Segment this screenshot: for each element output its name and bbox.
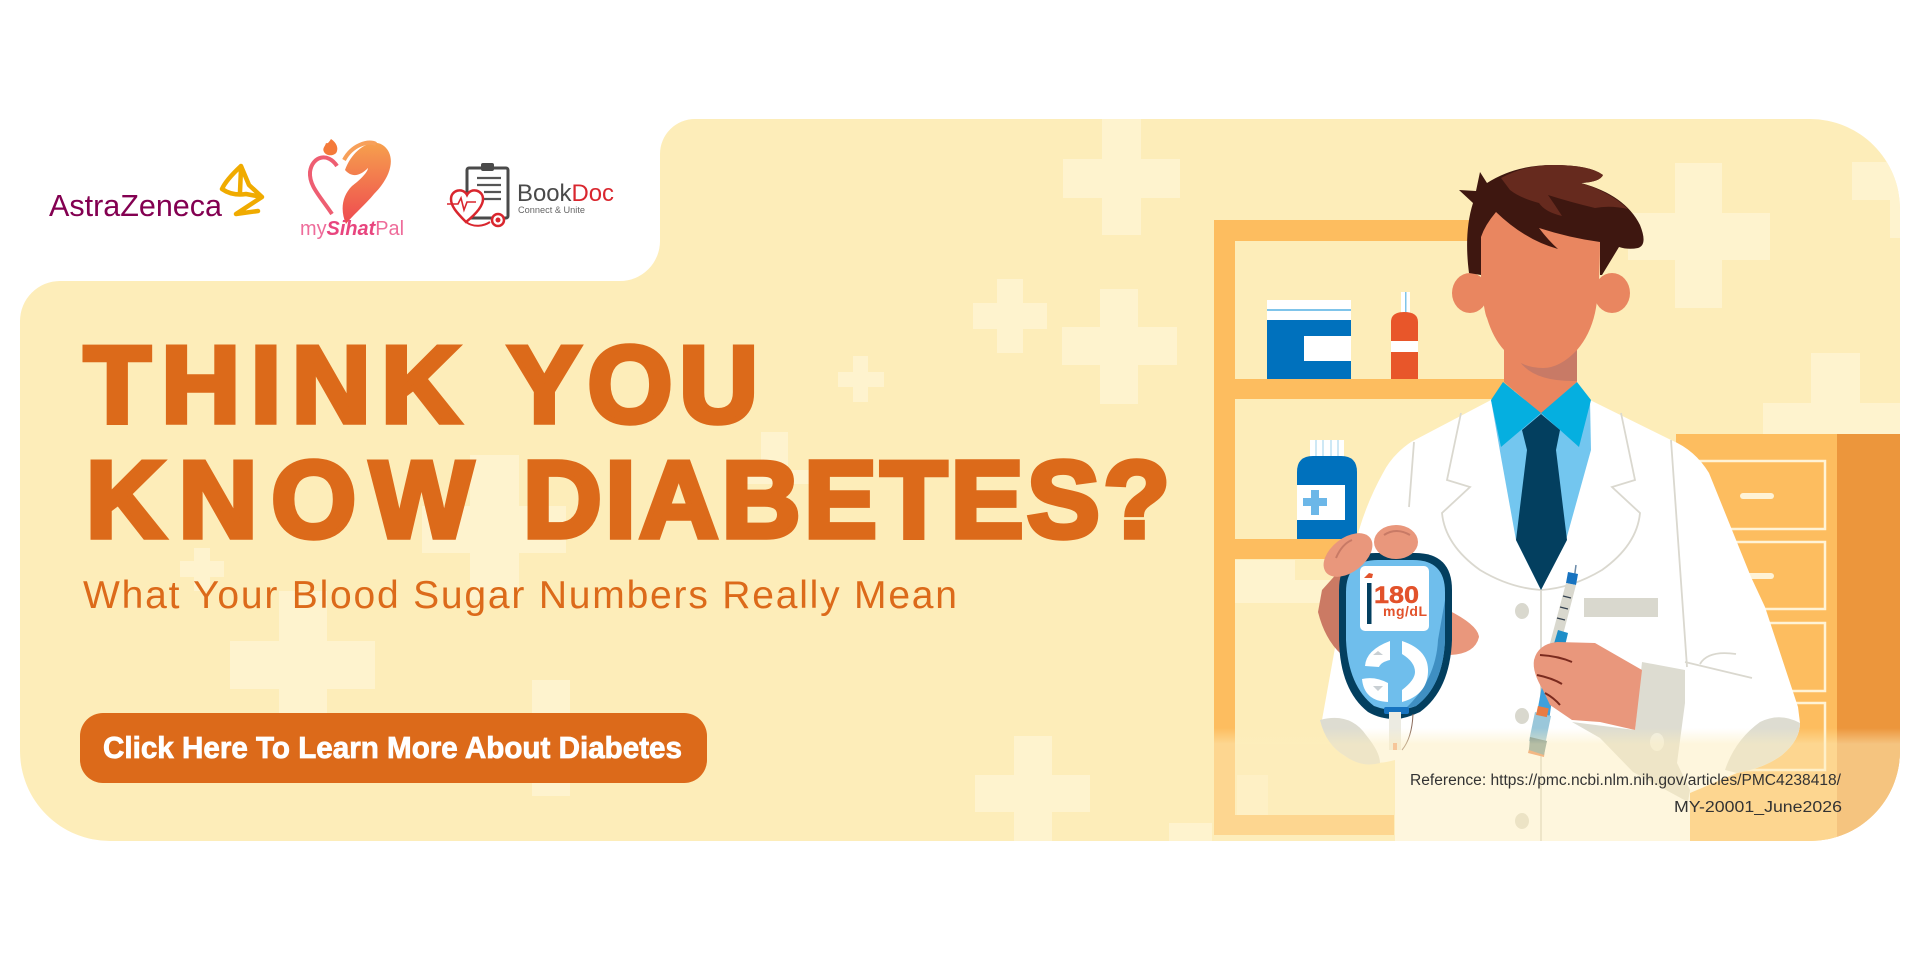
- orange spray bottle: [1391, 292, 1418, 379]
- logo: BookDoc: BookDoc: [517, 180, 614, 207]
- title: KNOW: [86, 439, 473, 561]
- logo: BookDoc: Connect & Unite: [518, 205, 585, 215]
- glucose meter: 180: [1374, 582, 1419, 609]
- tie: [1516, 414, 1567, 590]
- shirt: [1491, 400, 1591, 590]
- drawer cabinet: [1676, 434, 1900, 844]
- illustration: pharmacy scene: [1214, 165, 1914, 850]
- bottom fade overlay: [1214, 728, 1914, 848]
- left hand: [1318, 570, 1479, 655]
- button: Click Here To Learn More About Diabetes: [103, 730, 682, 765]
- logos row: [49, 139, 614, 240]
- decorative plus pattern: [180, 119, 1900, 841]
- collar: [1491, 382, 1591, 447]
- shelf unit: [1214, 220, 1514, 835]
- subtitle: What Your Blood Sugar Numbers Really Mean: [83, 574, 957, 617]
- logo: AstraZeneca: [49, 166, 262, 223]
- title: DIABETES?: [523, 439, 1170, 561]
- title: THINK: [84, 324, 460, 446]
- blue box on shelf: [1267, 300, 1351, 379]
- title: [84, 324, 1170, 561]
- logo: mySihatPal: mySihatPal: [300, 218, 404, 240]
- hair: [1459, 165, 1644, 275]
- glucose meter: [1339, 553, 1452, 750]
- right hand and cuff: [1534, 642, 1690, 802]
- head: [1452, 205, 1630, 368]
- logo: BookDoc: [447, 163, 614, 226]
- doctor: [1315, 165, 1800, 850]
- neck shadow: [1520, 350, 1577, 381]
- insulin pen: [1528, 565, 1578, 757]
- fingers on meter: [1324, 525, 1418, 577]
- title: YOU: [508, 324, 758, 446]
- blue medicine bottle: [1297, 440, 1357, 539]
- logo: mySihatPal: [300, 139, 404, 240]
- reference text: Reference: https://pmc.ncbi.nlm.nih.gov/articles/PMC4238418/: [1410, 772, 1842, 789]
- document code: MY-20001_June2026: [1674, 799, 1842, 816]
- neck: [1504, 350, 1577, 414]
- button: [80, 713, 707, 783]
- logo: AstraZeneca: AstraZeneca: [49, 188, 223, 223]
- glucose meter: mg/dL: [1383, 603, 1427, 619]
- background panel: [20, 119, 1900, 841]
- lab coat: [1320, 400, 1800, 850]
